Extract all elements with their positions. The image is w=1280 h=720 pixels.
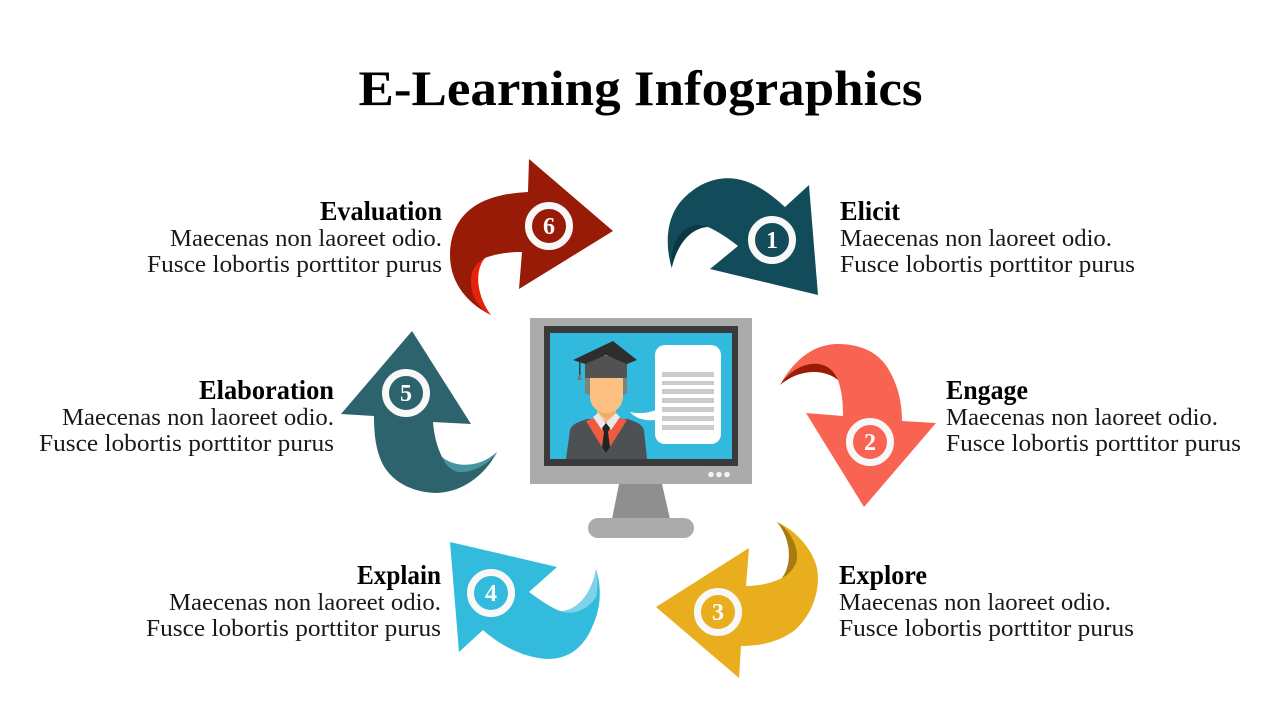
text block: Elicit [840,196,1135,278]
text block: Elaboration [39,375,334,457]
arrow 2: Engage [780,344,936,507]
number badge 2 [850,422,890,462]
arrow 1: Elicit [668,178,818,295]
sliver: Explain highlight [560,569,598,613]
text block: Evaluation [147,196,442,278]
graduate figure [566,341,647,459]
number badge 1: 1 [766,228,778,254]
text block: Explore: Maecenas non laoreet odio. [839,590,1111,616]
text block: Elicit: Maecenas non laoreet odio. [840,226,1112,252]
text block: Elicit: Fusce lobortis porttitor purus [840,252,1135,278]
text block: Evaluation: Fusce lobortis porttitor purus [147,252,442,278]
sliver: Evaluation highlight [471,258,491,315]
speech bubble [630,345,721,444]
number badge 1 [752,220,792,260]
number badge 3: 3 [712,600,724,626]
monitor bezel [544,326,738,466]
number badge 4 [470,572,512,614]
text block: Engage [946,375,1241,457]
arrow 6: Evaluation [450,159,613,315]
central monitor [530,318,752,538]
text block: Explain: Fusce lobortis porttitor purus [146,616,441,642]
text block: Engage: Maecenas non laoreet odio. [946,405,1218,431]
monitor stand [612,484,670,519]
title: E-Learning Infographics [358,60,922,116]
text block: Evaluation: Evaluation [320,196,442,226]
number badge 5 [386,372,426,414]
number badge 4: 4 [485,581,497,607]
text block: Explain [146,560,441,642]
text block: Elicit: Elicit [840,196,900,226]
arrow 5: Elaboration [341,331,497,493]
sliver: Elaboration highlight [442,452,497,472]
monitor screen [550,333,732,459]
number badge 2: 2 [864,430,876,456]
text block: Engage: Engage [946,375,1028,405]
text block: Elaboration: Maecenas non laoreet odio. [62,405,334,431]
sliver: Elicit shadow [671,225,708,268]
arrow 4: Explain [450,542,600,659]
arrow 3: Explore [656,522,818,678]
monitor buttons [708,472,730,477]
text block: Elaboration: Fusce lobortis porttitor purus [39,431,334,457]
text block: Explain: Maecenas non laoreet odio. [169,590,441,616]
text block: Explain: Explain [357,560,441,590]
sliver: Engage shadow [780,364,838,385]
monitor frame [530,318,752,484]
number badge 6 [528,206,570,246]
text block: Evaluation: Maecenas non laoreet odio. [170,226,442,252]
monitor base [588,518,694,538]
sliver: Explore shadow [777,522,797,578]
text block: Engage: Fusce lobortis porttitor purus [946,431,1241,457]
number badge 5: 5 [400,381,412,407]
number badge 6: 6 [543,214,555,240]
text block: Explore: Explore [839,560,927,590]
text block: Explore: Fusce lobortis porttitor purus [839,616,1134,642]
number badge 3 [698,592,738,632]
text block: Explore [839,560,1134,642]
text block: Elaboration: Elaboration [199,375,334,405]
